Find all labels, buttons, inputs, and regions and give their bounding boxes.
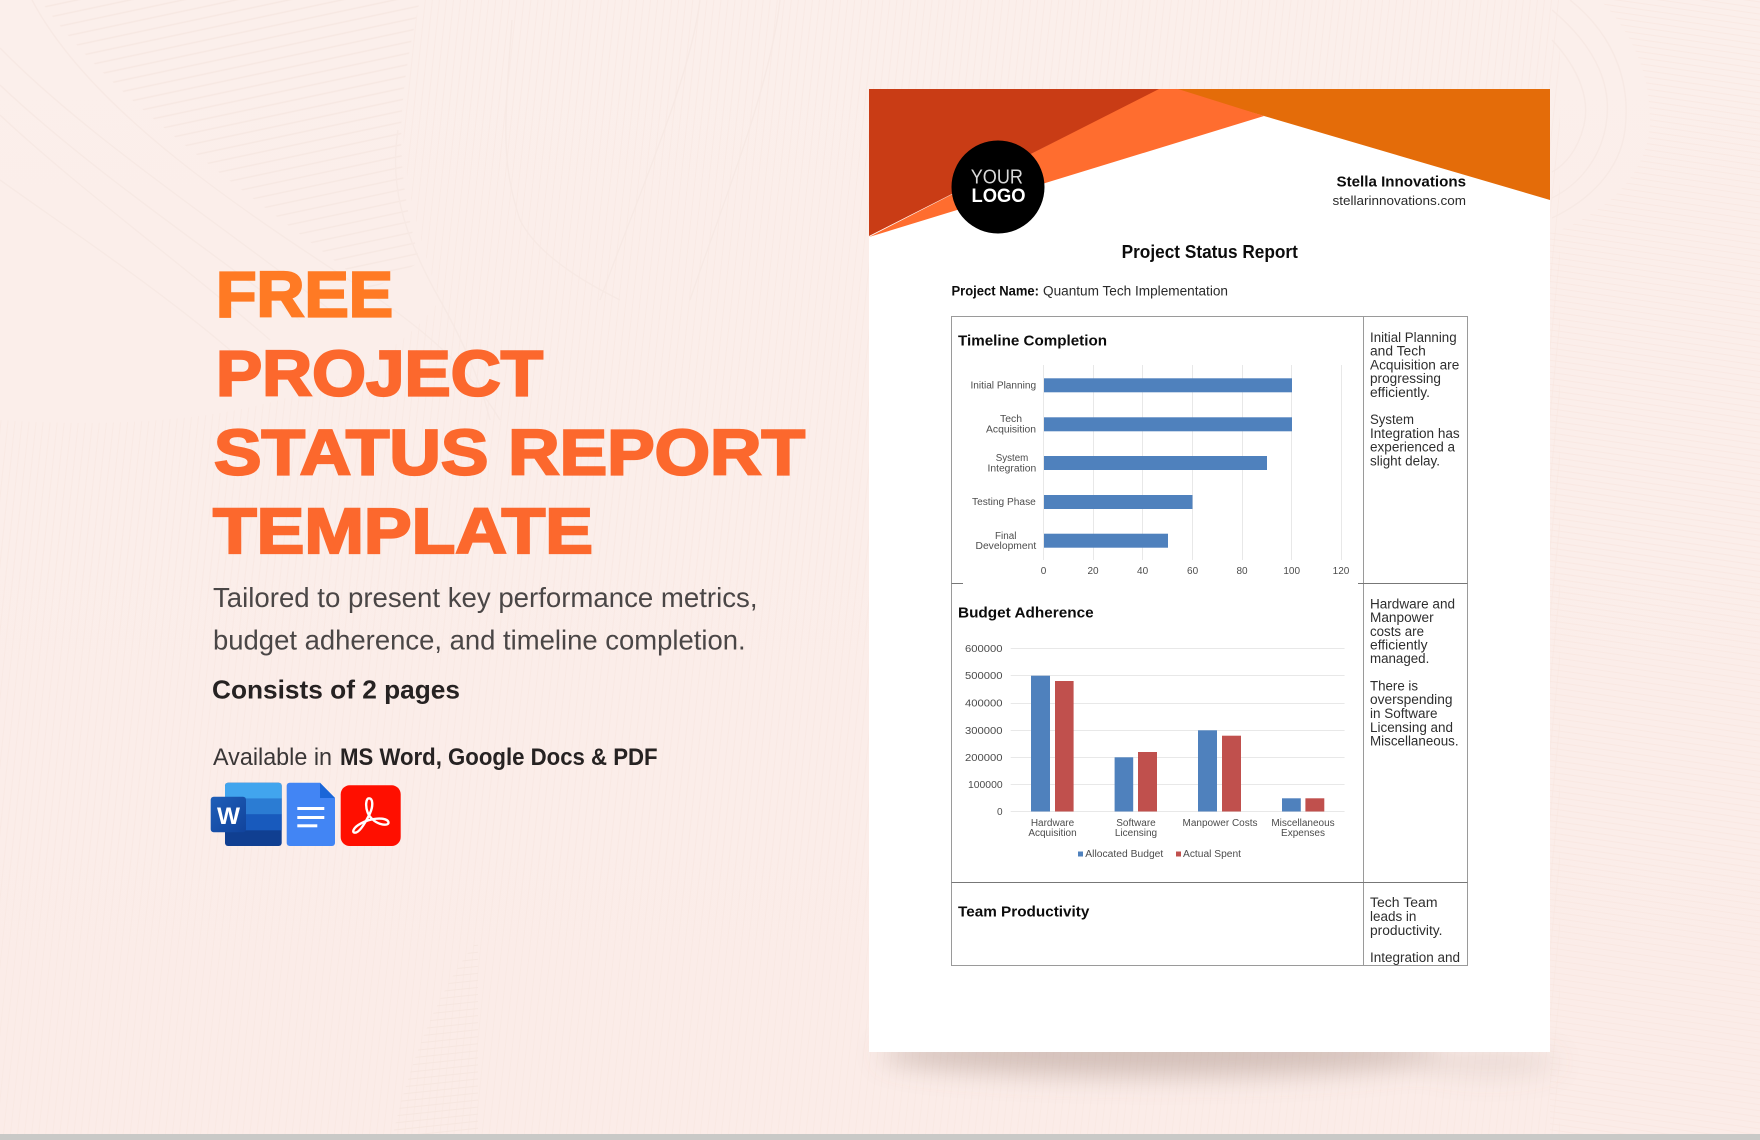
notes: budget adherence: in Software (1370, 706, 1438, 721)
column chart: budget adherence: Manpower Costs (1182, 818, 1258, 829)
title: PROJECT (216, 338, 543, 410)
available formats: Available in (213, 744, 332, 771)
column chart: budget adherence: Software (1116, 818, 1156, 829)
notes: timeline completion (1370, 330, 1460, 468)
bar chart: timeline completion: Testing Phase (972, 497, 1036, 508)
icon: MS Word (211, 783, 282, 846)
heading: timeline completion: Timeline Completion (958, 333, 1107, 350)
icon: MS Word: W (217, 803, 240, 830)
notes: budget adherence: There is (1370, 678, 1418, 694)
column chart: budget adherence: Licensing (1115, 828, 1157, 839)
panel: report page (869, 89, 1550, 1052)
available formats: MS Word, Google Docs & PDF (340, 744, 658, 771)
bar chart: timeline completion: Tech (1000, 414, 1022, 425)
column chart: budget adherence: Acquisition (1028, 828, 1077, 839)
project name: Project Name: (952, 284, 1039, 299)
bar chart: timeline completion: 40 (1137, 566, 1149, 577)
bar chart: timeline completion: Integration (988, 464, 1036, 474)
column chart: budget adherence: 300000 (965, 726, 1003, 737)
project name: Quantum Tech Implementation (1043, 284, 1228, 299)
bar chart: timeline completion: 120 (1333, 566, 1350, 577)
heading: budget adherence: Budget Adherence (958, 605, 1094, 622)
bar chart: timeline completion: 80 (1236, 566, 1248, 577)
column chart: budget adherence: 0 (997, 807, 1003, 818)
bar chart: timeline completion: 0 (1041, 566, 1047, 577)
bar chart: timeline completion: Development (976, 541, 1036, 552)
notes: budget adherence: Miscellaneous. (1370, 734, 1459, 748)
bar chart: timeline completion: System (996, 453, 1028, 464)
bottom grey band (0, 1134, 1760, 1140)
heading: team productivity: Team Productivity (958, 904, 1090, 921)
column chart: budget adherence: 600000 (965, 644, 1003, 655)
notes: timeline completion: System (1370, 412, 1414, 427)
notes: budget adherence: costs are (1370, 624, 1424, 639)
bar chart: timeline completion: Initial Planning (970, 380, 1036, 392)
notes: team productivity (1370, 895, 1460, 965)
section: team productivity (958, 895, 1460, 965)
logo badge: LOGO (972, 186, 1026, 207)
notes: timeline completion: Integration has (1370, 426, 1460, 441)
chart legend: Allocated Budget (1085, 849, 1164, 860)
section: timeline completion (958, 330, 1460, 577)
notes: budget adherence (1370, 596, 1459, 748)
page count: Consists of 2 pages (212, 675, 460, 705)
bar chart: timeline completion (970, 365, 1350, 577)
logo badge: YOUR (971, 167, 1023, 189)
company name and website: Stella Innovations (1336, 174, 1466, 191)
notes: team productivity: Integration and (1370, 950, 1460, 965)
column chart: budget adherence: 400000 (965, 698, 1003, 710)
notes: budget adherence: Licensing and (1370, 720, 1453, 735)
notes: timeline completion: Initial Planning (1370, 330, 1457, 345)
bar chart: timeline completion: 60 (1187, 566, 1199, 577)
bar chart: timeline completion: 20 (1087, 566, 1099, 577)
header shapes (869, 89, 1550, 237)
notes: budget adherence: efficiently (1370, 638, 1428, 652)
title: TEMPLATE (213, 495, 593, 567)
title (213, 259, 805, 567)
chart legend: Actual Spent (1183, 849, 1241, 860)
notes: timeline completion: experienced a (1370, 440, 1455, 455)
column chart: budget adherence: Miscellaneous (1271, 818, 1335, 829)
icon: Adobe PDF (341, 785, 401, 846)
notes: budget adherence: overspending (1370, 692, 1452, 707)
notes: timeline completion: efficiently. (1370, 385, 1430, 400)
bar chart: timeline completion: Acquisition (986, 424, 1036, 436)
notes: budget adherence: Manpower (1370, 610, 1434, 625)
icon: Google Docs (287, 783, 335, 846)
company name and website: stellarinnovations.com (1332, 193, 1466, 208)
description: budget adherence, and timeline completion. (213, 624, 746, 655)
column chart: budget adherence: 100000 (968, 780, 1003, 791)
section: budget adherence (958, 596, 1459, 860)
notes: timeline completion: progressing (1370, 371, 1441, 386)
title: STATUS REPORT (214, 417, 805, 489)
table frame (952, 316, 1468, 966)
column chart: budget adherence: 500000 (965, 671, 1003, 682)
notes: timeline completion: Acquisition are (1370, 358, 1459, 372)
report title: Project Status Report (1122, 242, 1298, 262)
notes: budget adherence: managed. (1370, 651, 1429, 666)
column chart: budget adherence: 200000 (965, 753, 1003, 764)
notes: team productivity: Tech Team (1370, 895, 1438, 910)
notes: timeline completion: and Tech (1370, 344, 1426, 359)
company name and website (1332, 174, 1466, 208)
available formats (213, 744, 658, 771)
bar chart: timeline completion: 100 (1283, 566, 1300, 577)
notes: timeline completion: slight delay. (1370, 454, 1440, 468)
description: Tailored to present key performance metrics, (213, 582, 758, 613)
page drop shadow (880, 1032, 1560, 1076)
notes: budget adherence: Hardware and (1370, 596, 1455, 611)
notes: team productivity: leads in (1370, 909, 1416, 924)
notes: team productivity: productivity. (1370, 923, 1442, 938)
logo badge (952, 140, 1044, 234)
column chart: budget adherence: Hardware (1031, 818, 1075, 829)
project name (952, 284, 1228, 299)
title: FREE (216, 259, 393, 331)
description (213, 582, 758, 655)
bar chart: timeline completion: Final (995, 531, 1016, 542)
column chart: budget adherence: Expenses (1281, 828, 1325, 839)
chart legend (1078, 849, 1241, 860)
column chart: budget adherence (965, 644, 1345, 860)
